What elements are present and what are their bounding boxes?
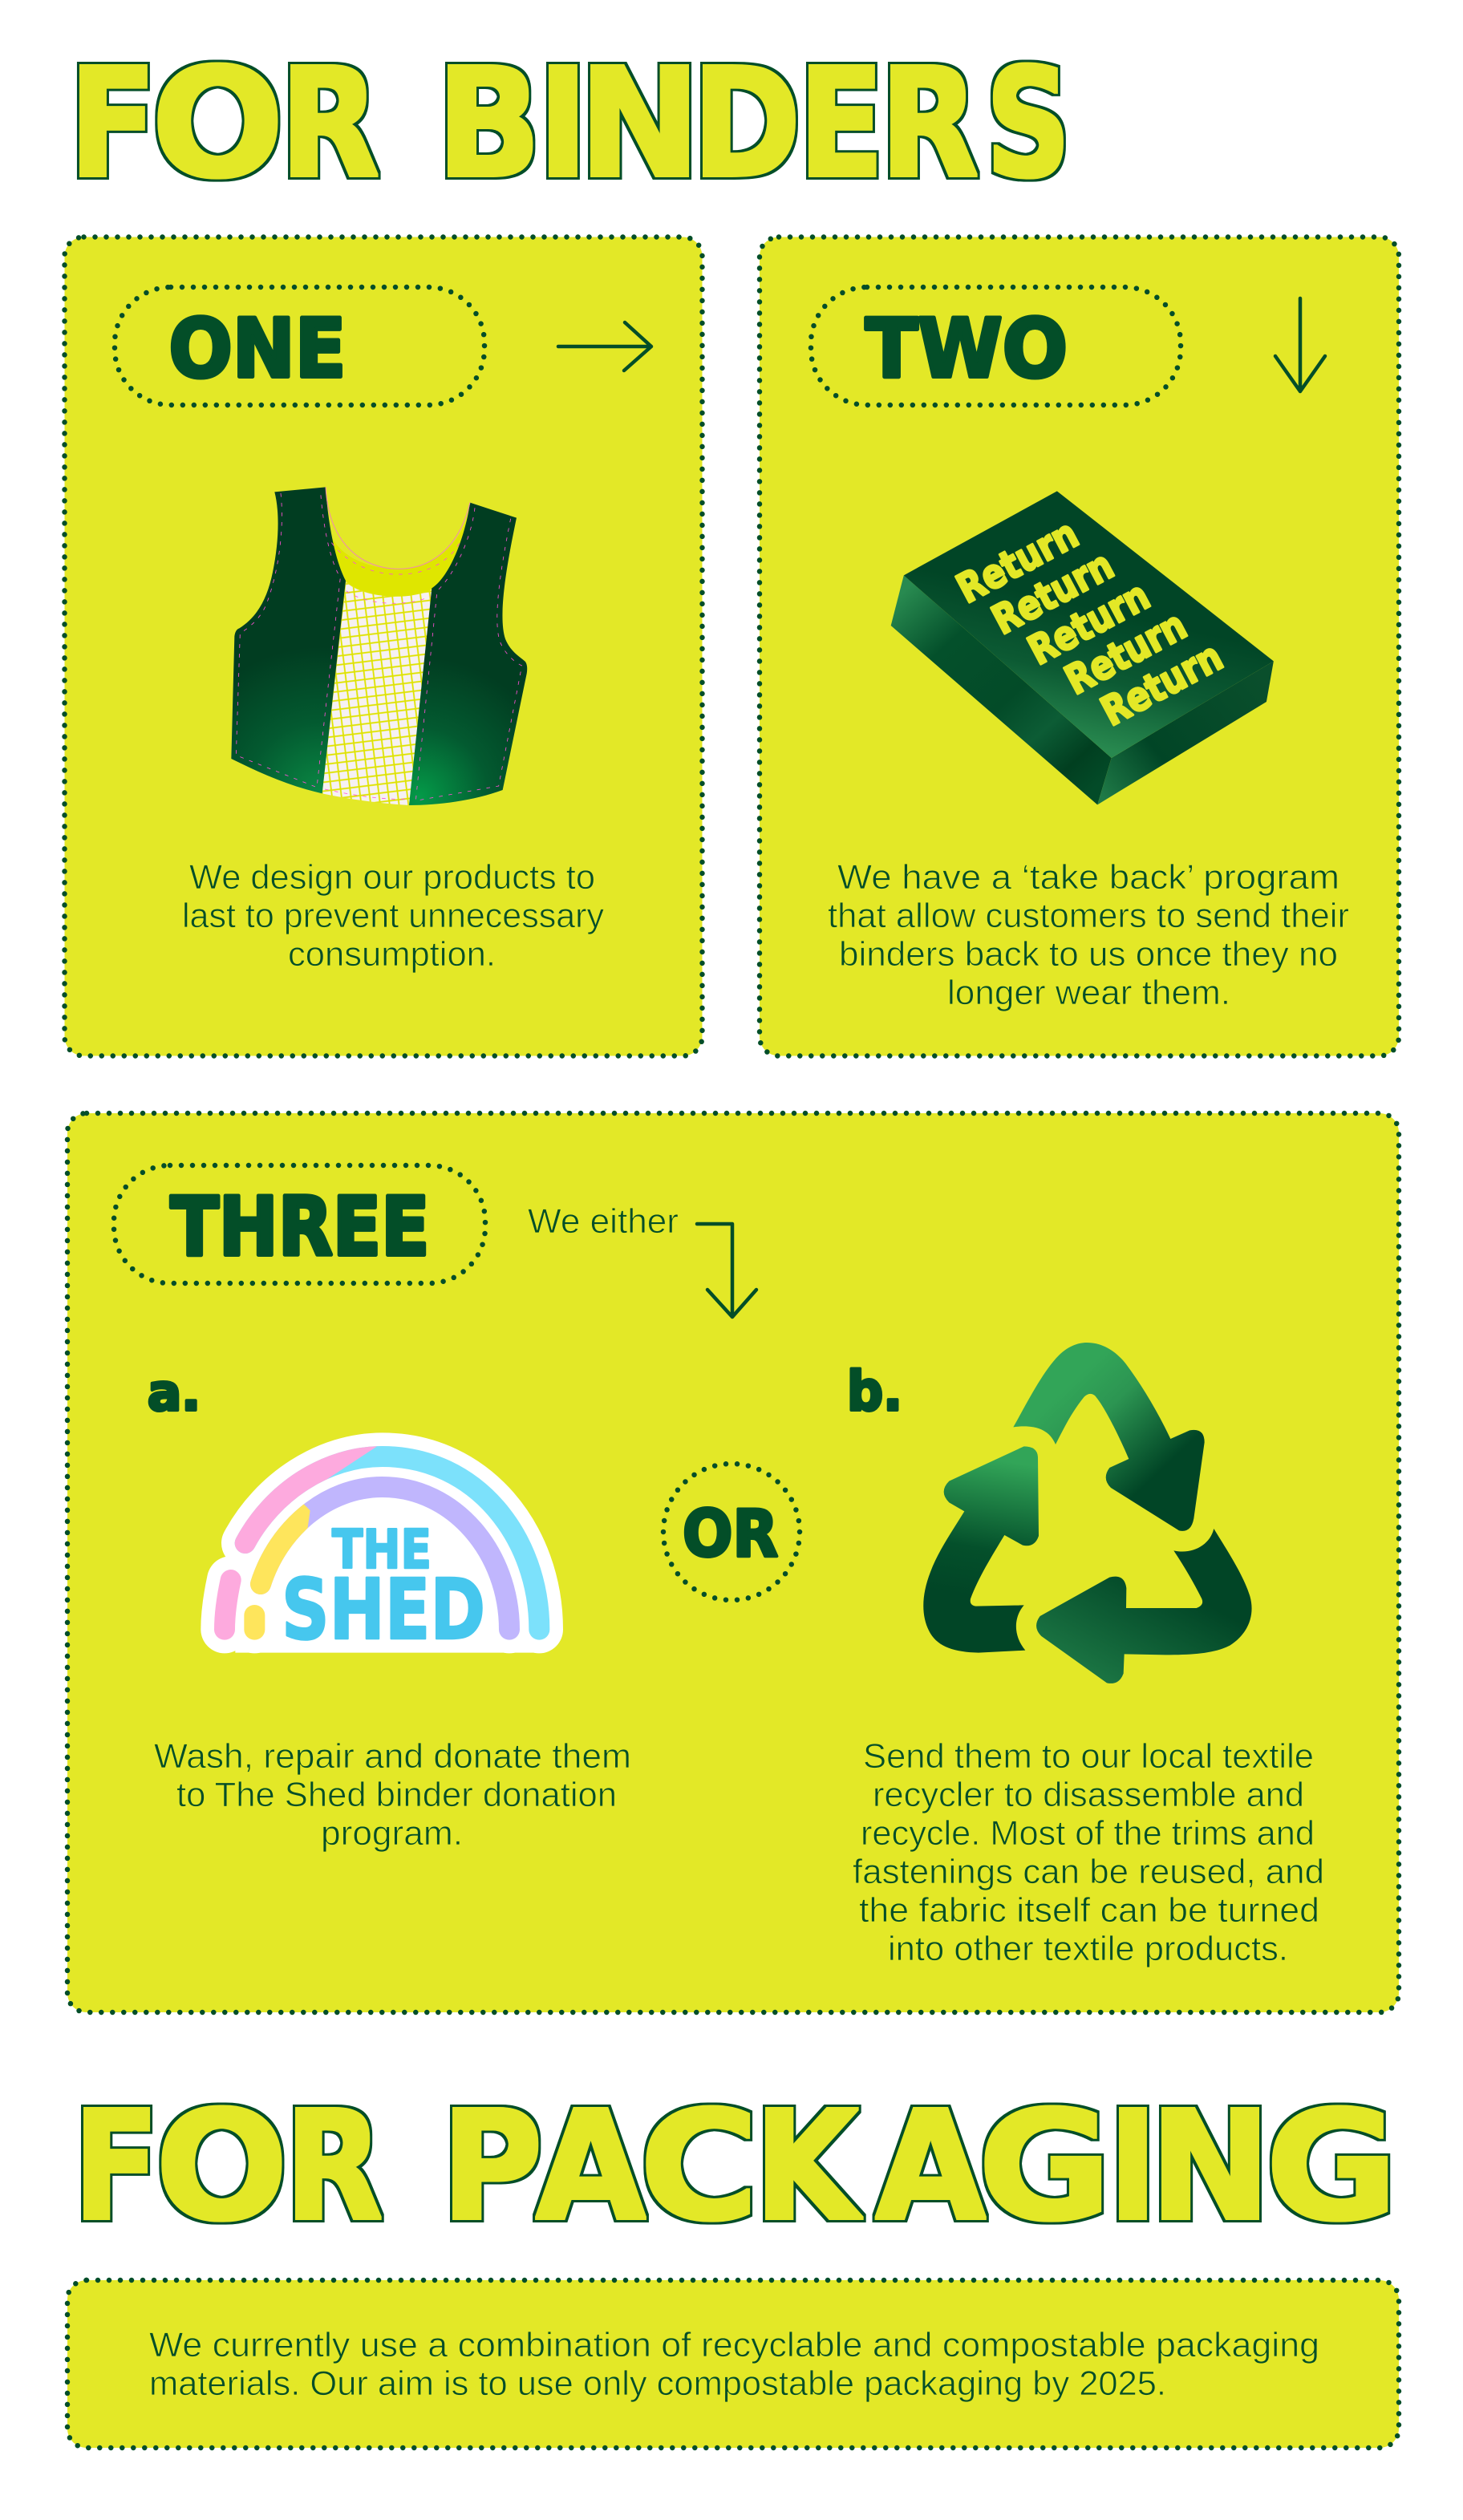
pill: one: ONE xyxy=(168,302,346,396)
illustration: return package: Return xyxy=(1020,572,1157,675)
title: for binders: E xyxy=(799,36,884,212)
label: b: b. xyxy=(847,1360,902,1424)
title: for packaging: K xyxy=(755,2079,862,2255)
pill: three: THREE xyxy=(170,1179,430,1274)
title: for packaging: O xyxy=(156,2079,288,2255)
text: option b xyxy=(853,1737,1324,1968)
title: for packaging: F xyxy=(74,2079,159,2255)
title: for binders: O xyxy=(152,36,284,212)
text: two xyxy=(828,858,1349,1012)
title: for packaging: I xyxy=(1108,2079,1157,2255)
text: packaging: We currently use a combination of recyclable and compostable packaging xyxy=(149,2326,1319,2364)
logo: the shed rainbow: THE xyxy=(332,1518,432,1581)
logo: the shed rainbow xyxy=(225,1456,539,1659)
text: option b: recycler to disassemble and xyxy=(873,1776,1304,1814)
panel: packaging xyxy=(67,2280,1399,2448)
pill: two: TWO xyxy=(865,302,1068,396)
illustration: return package: Return xyxy=(984,541,1121,644)
title: for binders: S xyxy=(986,36,1071,212)
text: option b: Send them to our local textile xyxy=(863,1737,1314,1776)
text: option a: to The Shed binder donation xyxy=(176,1776,617,1814)
illustration: binder vest xyxy=(231,487,527,805)
arrow: right xyxy=(558,322,651,371)
title: for packaging: A xyxy=(536,2079,646,2255)
title: for packaging: C xyxy=(639,2079,759,2255)
title: for binders: N xyxy=(578,36,701,212)
pill: two xyxy=(811,287,1181,405)
text: we either: We either xyxy=(528,1202,679,1241)
title: for packaging: G xyxy=(978,2079,1112,2255)
text: option b: recycle. Most of the trims and xyxy=(861,1814,1315,1853)
text: one xyxy=(182,858,604,974)
text: packaging: materials. Our aim is to use only compostable packaging by 2025. xyxy=(149,2364,1166,2403)
title: for binders: R xyxy=(280,36,379,212)
pill: three xyxy=(114,1165,485,1283)
text: option a: Wash, repair and donate them xyxy=(154,1737,631,1776)
title: for packaging: A xyxy=(876,2079,986,2255)
panel: three xyxy=(67,1113,1399,2012)
text: option b: into other textile products. xyxy=(888,1930,1288,1968)
text: one: last to prevent unnecessary xyxy=(182,897,604,935)
title: for binders: F xyxy=(69,36,156,212)
text: two: binders back to us once they no xyxy=(839,935,1338,974)
panel: one xyxy=(64,237,703,1055)
title: for binders: D xyxy=(692,36,800,212)
title: for binders: B xyxy=(436,36,541,212)
text: one: We design our products to xyxy=(189,858,595,897)
label: a: a. xyxy=(148,1363,201,1422)
title: for packaging: N xyxy=(1149,2079,1271,2255)
text: one: consumption. xyxy=(288,935,496,974)
badge: or xyxy=(663,1464,800,1600)
arrow: down xyxy=(1275,298,1325,391)
title: for packaging: G xyxy=(1266,2079,1398,2255)
illustration: return package xyxy=(891,491,1274,804)
illustration: return package: Return xyxy=(1057,602,1194,704)
text: option b: the fabric itself can be turned xyxy=(859,1891,1319,1930)
logo: the shed rainbow: SHED xyxy=(282,1561,485,1659)
text: two: longer wear them. xyxy=(947,974,1230,1012)
text: option a: program. xyxy=(321,1814,463,1853)
title: for binders: R xyxy=(880,36,979,212)
text: packaging xyxy=(149,2326,1319,2403)
text: option a xyxy=(154,1737,631,1853)
text: option b: fastenings can be reused, and xyxy=(853,1853,1324,1891)
pill: one xyxy=(115,287,484,405)
badge: or: OR xyxy=(683,1497,778,1571)
title: for packaging: R xyxy=(286,2079,383,2255)
panel: two xyxy=(760,237,1399,1055)
text: two: We have a ‘take back’ program xyxy=(837,858,1339,897)
arrow: elbow down xyxy=(697,1224,756,1317)
icon: recycle xyxy=(923,1343,1252,1683)
title: for binders: I xyxy=(537,36,589,212)
illustration: return package: Return xyxy=(949,510,1086,613)
illustration: return package: Return xyxy=(1093,633,1230,735)
text: two: that allow customers to send their xyxy=(828,897,1349,935)
title: for packaging: P xyxy=(441,2079,542,2255)
